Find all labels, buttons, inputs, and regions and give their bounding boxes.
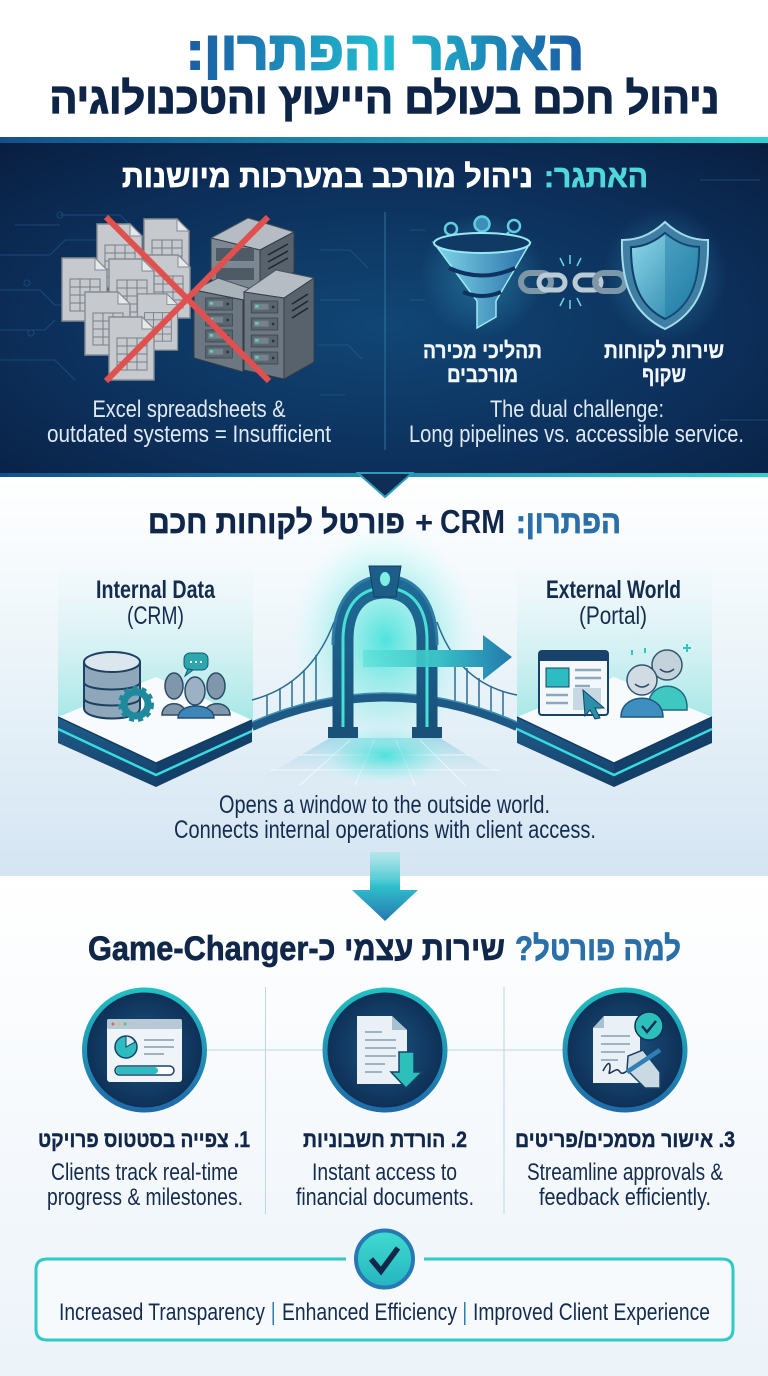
arrow: challenge to solution <box>358 473 412 497</box>
benefits text: Improved Client Experience <box>473 1299 710 1326</box>
left caption: outdated systems = Insufficient <box>47 421 331 448</box>
icon: approve documents <box>565 990 685 1110</box>
internal label: (CRM) <box>127 602 184 630</box>
right caption: The dual challenge: <box>490 396 664 423</box>
title <box>50 21 720 123</box>
arrow: bridge to portal <box>363 635 512 680</box>
floor grid <box>250 725 515 785</box>
solution heading: פורטל לקוחות חכם <box>148 504 405 540</box>
gate glow <box>290 525 480 755</box>
icon: database and team <box>84 652 230 720</box>
right caption <box>409 396 744 448</box>
title: ניהול חכם בעולם הייעוץ והטכנולוגיה <box>50 75 720 123</box>
step 2: 2. הורדת חשבוניות <box>303 1127 467 1152</box>
icon: spreadsheets <box>62 219 190 380</box>
portal arch <box>328 566 442 738</box>
solution heading <box>148 503 621 540</box>
divider <box>384 212 386 450</box>
funnel label: תהליכי מכירה <box>423 338 542 363</box>
panel: why portal <box>0 852 768 1376</box>
icon: servers <box>194 218 314 379</box>
solution caption <box>174 791 596 844</box>
left caption: Excel spreadsheets & <box>92 396 286 423</box>
step 2: Instant access to <box>312 1159 457 1186</box>
step 2 <box>296 1127 474 1211</box>
challenge heading: ניהול מורכב במערכות מיושנות <box>122 159 533 194</box>
solution heading: + <box>415 505 433 540</box>
step 3: Streamline approvals & <box>527 1159 723 1186</box>
panel: solution <box>0 473 768 876</box>
external label: (Portal) <box>579 602 647 630</box>
challenge heading: האתגר: <box>544 159 648 194</box>
title: האתגר והפתרון: <box>186 21 584 81</box>
benefits text: Increased Transparency <box>59 1299 265 1326</box>
internal label: Internal Data <box>96 576 216 604</box>
why heading: שירות עצמי כ-Game-Changer <box>88 930 505 968</box>
shield label <box>604 338 724 387</box>
callout: benefits <box>36 1230 733 1340</box>
icon: funnel <box>420 213 544 337</box>
icon: shield <box>603 207 727 343</box>
bridge <box>252 622 517 727</box>
left caption <box>47 396 331 448</box>
icon: broken chain <box>521 255 625 309</box>
benefits text <box>59 1299 710 1326</box>
benefits text: Enhanced Efficiency <box>282 1299 457 1326</box>
external platform <box>517 677 712 787</box>
funnel label <box>423 338 542 387</box>
step 1 <box>38 1127 250 1211</box>
solution caption: Opens a window to the outside world. <box>219 791 550 819</box>
external panel glow <box>517 570 712 720</box>
external label: External World <box>546 576 681 604</box>
external label <box>546 576 681 630</box>
funnel label: מורכבים <box>447 362 518 387</box>
internal platform <box>58 677 252 787</box>
icon: check badge <box>356 1230 413 1288</box>
icon: red cross <box>106 217 269 381</box>
icon: download invoices <box>325 990 445 1110</box>
step 3 <box>515 1127 735 1211</box>
step 3: 3. אישור מסמכים/פריטים <box>515 1127 735 1152</box>
icon: portal and happy clients <box>539 644 691 719</box>
arrow: down <box>352 852 418 921</box>
panel: challenge <box>0 137 768 477</box>
step 2: financial documents. <box>296 1184 474 1211</box>
solution caption: Connects internal operations with client access. <box>174 816 596 844</box>
step 1: progress & milestones. <box>47 1184 243 1211</box>
internal panel glow <box>58 570 253 720</box>
solution heading: CRM <box>440 503 505 540</box>
solution heading: הפתרון: <box>516 504 621 540</box>
icon: project status <box>84 990 204 1110</box>
shield label: שקוף <box>642 362 686 387</box>
step 1: 1. צפייה בסטטוס פרויקט <box>38 1127 250 1152</box>
why heading: למה פורטל? <box>515 930 681 968</box>
step 3: feedback efficiently. <box>539 1184 711 1211</box>
step 1: Clients track real-time <box>51 1159 238 1186</box>
shield label: שירות לקוחות <box>604 338 724 363</box>
internal label <box>96 576 216 630</box>
